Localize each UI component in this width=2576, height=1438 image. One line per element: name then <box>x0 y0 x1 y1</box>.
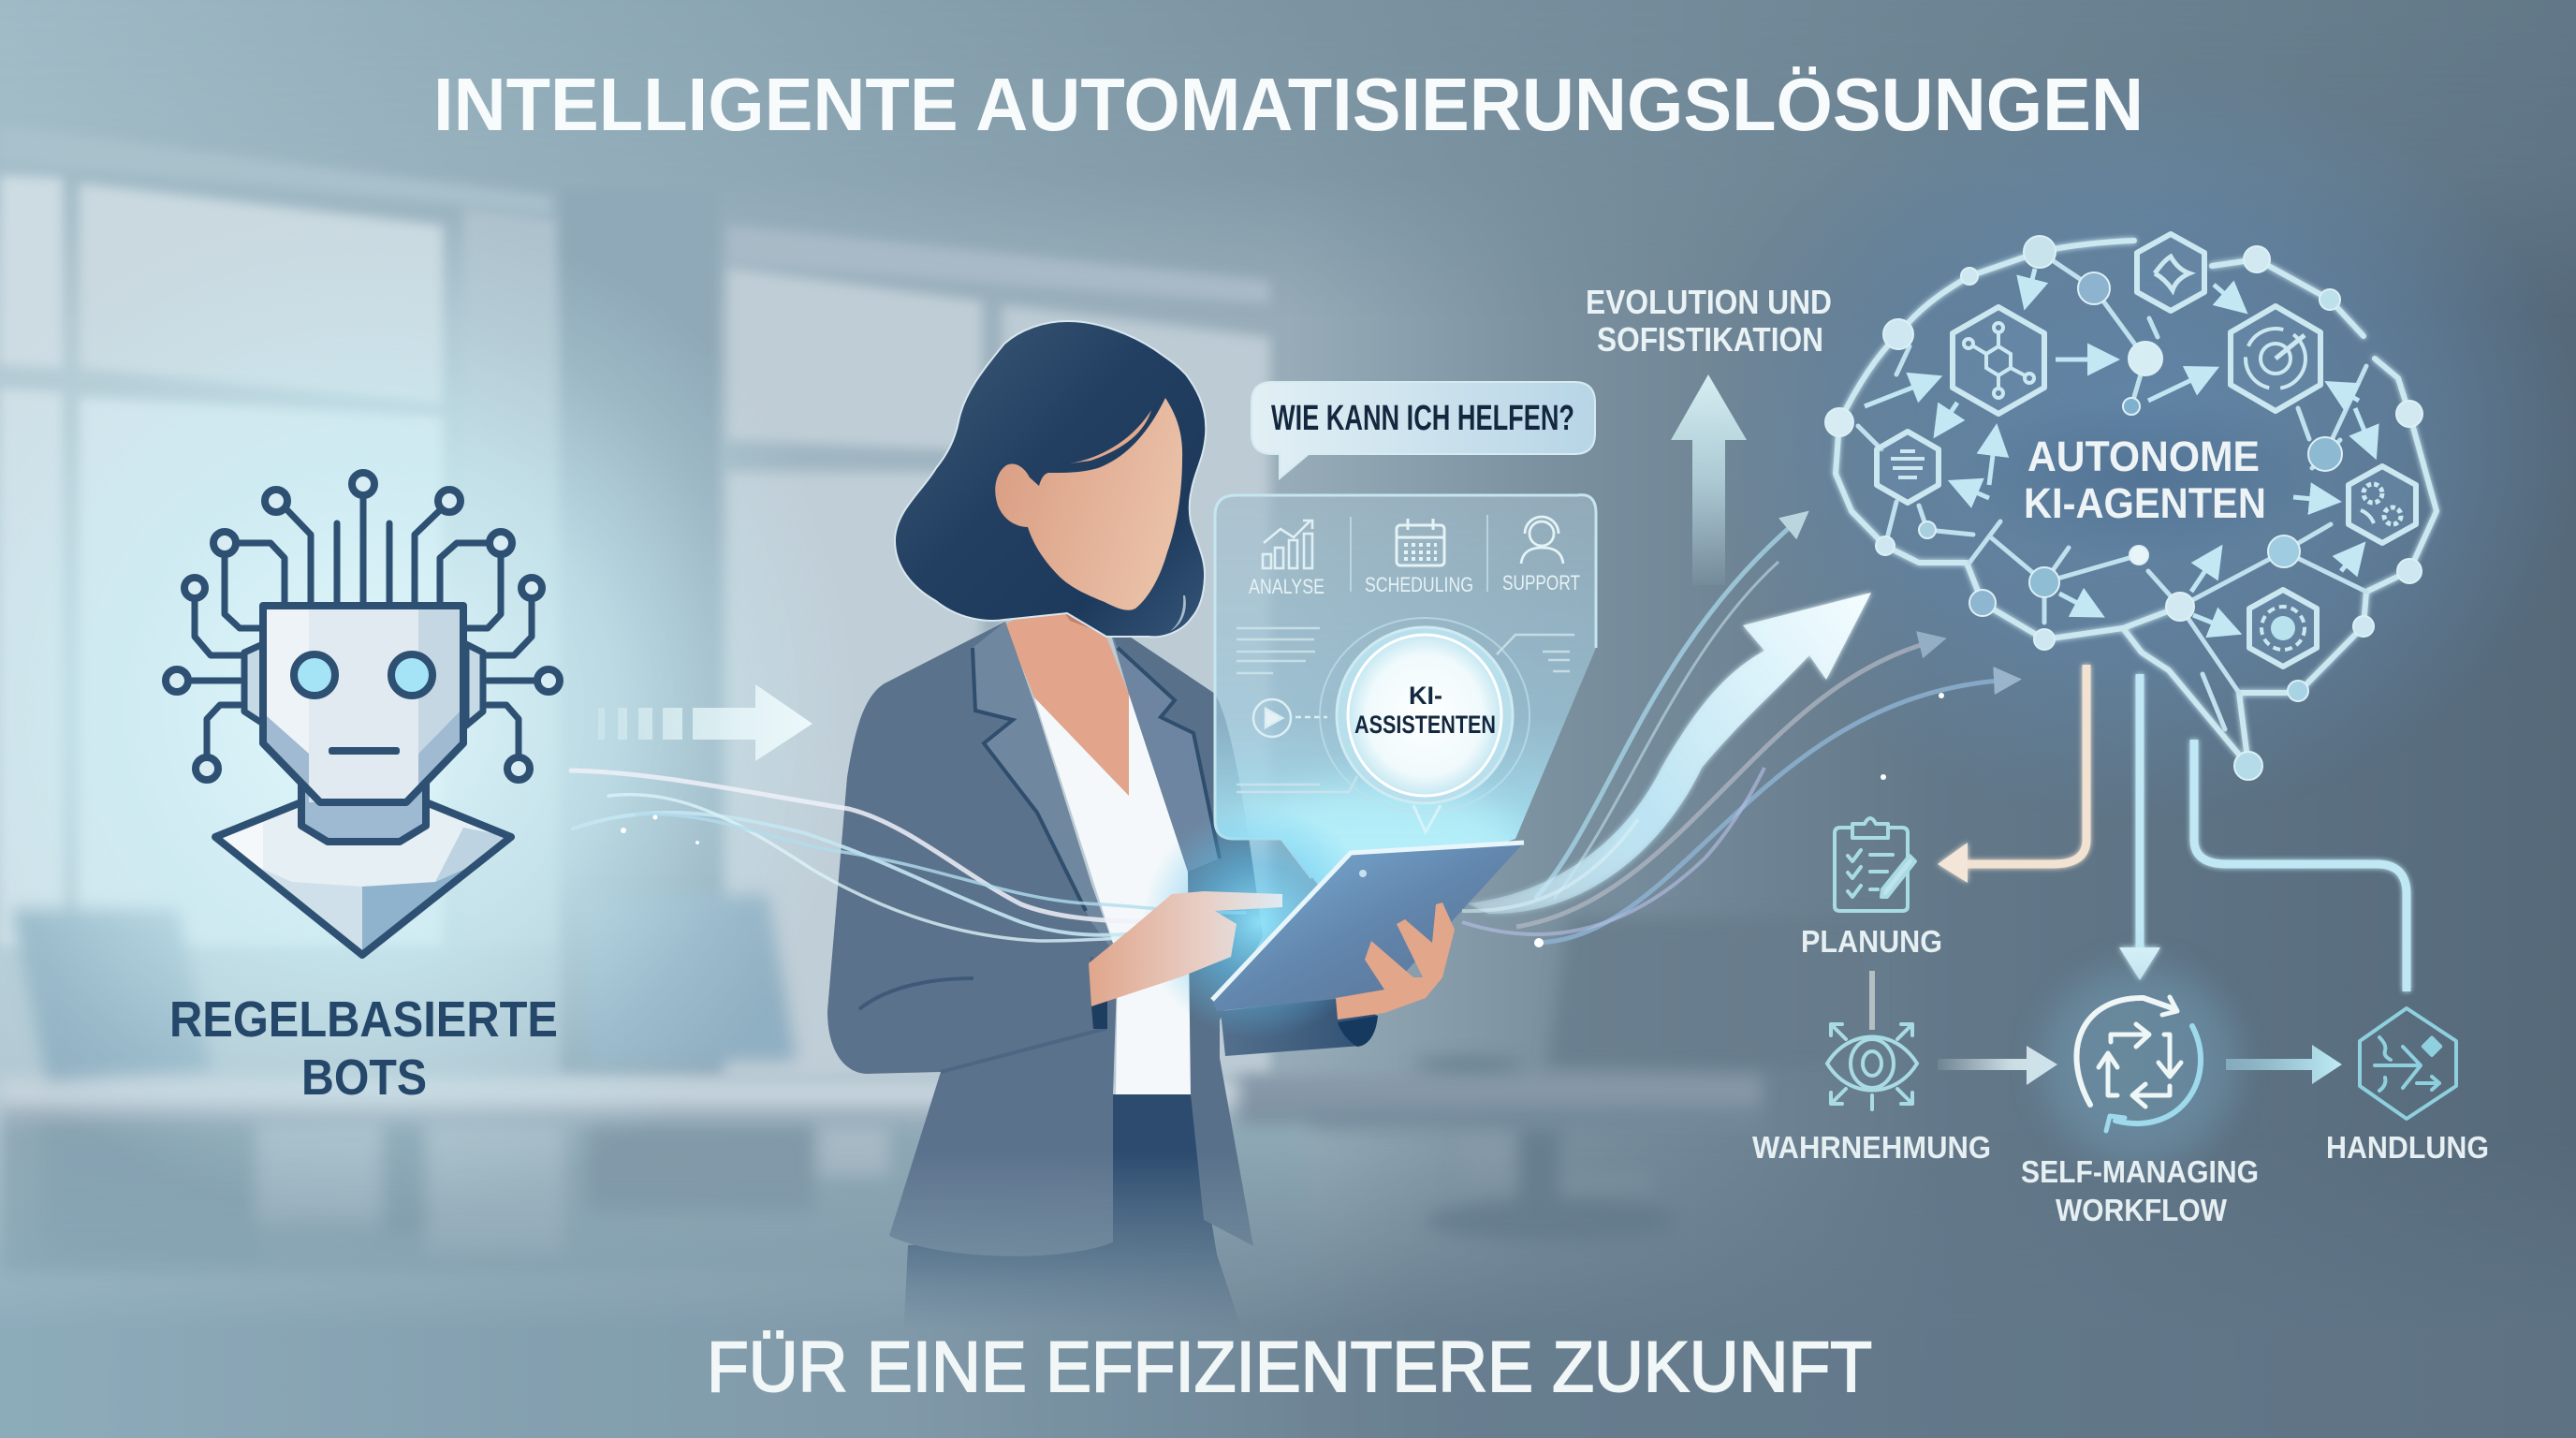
step: handlung <box>2326 1008 2489 1165</box>
hair <box>895 321 1206 637</box>
label: evolution und sofistikation <box>1586 283 1832 359</box>
step: planung: PLANUNG <box>1801 924 1942 959</box>
central text haze <box>1956 393 2331 562</box>
step: self-managing workflow <box>2021 966 2259 1227</box>
icon: clipboard <box>1835 818 1915 911</box>
label: regelbasierte bots <box>169 991 558 1106</box>
icon: support headset <box>1521 517 1563 564</box>
connector: planung to wahrnehmung <box>1869 971 1875 1030</box>
label: analyse: ANALYSE <box>1249 575 1325 598</box>
circle: ki-assistenten: ASSISTENTEN <box>1354 711 1496 739</box>
robot circuit nodes <box>166 473 560 780</box>
icon: calendar <box>1397 519 1444 565</box>
blue arrow <box>1539 680 2012 943</box>
brain hexagons <box>1877 234 2416 667</box>
vertical evolution arrow <box>1671 374 1747 585</box>
label: regelbasierte bots: REGELBASIERTE <box>169 991 558 1048</box>
trousers <box>904 1094 1236 1314</box>
tan arrow <box>1516 640 1938 927</box>
evolution arrows and swoosh <box>1462 517 2012 947</box>
blazer <box>827 622 1378 1256</box>
connector to workflow <box>2119 674 2160 980</box>
icon: eye <box>1827 1024 1917 1109</box>
step: planung <box>1801 818 1942 959</box>
speech bubble <box>1251 382 1595 478</box>
tablet and hands <box>1089 805 1524 1039</box>
step: handlung: HANDLUNG <box>2326 1130 2489 1165</box>
tablet device <box>1212 843 1524 1011</box>
step: wahrnehmung <box>1752 1024 1991 1165</box>
holding hand <box>1336 902 1455 1020</box>
brain network <box>1825 234 2437 780</box>
face and ear <box>995 398 1182 610</box>
step: self-managing workflow: WORKFLOW <box>2056 1193 2228 1227</box>
workflow glow <box>2042 966 2238 1163</box>
robot mouth <box>329 747 400 755</box>
label: evolution und sofistikation: SOFISTIKATION <box>1597 320 1823 359</box>
table and chairs <box>0 894 1872 1274</box>
dividers <box>1351 515 1487 592</box>
hologram glow <box>1236 785 1516 901</box>
arrow: bot to assistant <box>598 684 812 761</box>
icon: cycle arrows <box>2076 997 2201 1131</box>
brain outline <box>1836 241 2437 766</box>
circle: ki-assistenten: KI- <box>1409 682 1442 710</box>
brain connections <box>1858 252 2366 729</box>
brain backdrop glow <box>1704 56 2576 824</box>
label: evolution und sofistikation: EVOLUTION UND <box>1586 283 1832 321</box>
robot body <box>215 802 511 955</box>
connector to planung <box>1938 665 2086 883</box>
robot head <box>263 606 463 802</box>
icon: play button <box>1253 699 1327 737</box>
text line placeholders <box>1237 628 1574 792</box>
label: autonome ki-agenten <box>2024 433 2266 527</box>
speech bubble: WIE KANN ICH HELFEN? <box>1271 399 1574 438</box>
person with tablet <box>827 321 1378 1339</box>
energy waves left <box>571 770 1245 941</box>
connector from handlung <box>2194 740 2407 991</box>
arrow: wahrnehmung to workflow <box>1938 1046 2057 1085</box>
hand glow <box>1142 805 1376 1039</box>
robot circuit wires <box>190 499 535 756</box>
shirt <box>1034 694 1191 1094</box>
step: self-managing workflow: SELF-MANAGING <box>2021 1154 2259 1189</box>
under-table shapes <box>42 1057 1676 1260</box>
hair strand <box>1170 595 1186 631</box>
workflow connectors <box>1938 665 2407 991</box>
hexagon icons <box>1891 257 2401 650</box>
fringe sliver <box>1070 410 1151 463</box>
sweep lines from tablet <box>1462 768 1764 934</box>
icon: analyse chart <box>1263 521 1312 568</box>
big swoosh arrow <box>1468 593 1871 914</box>
robot eyes <box>294 654 432 696</box>
brain nodes <box>1825 236 2422 780</box>
step: wahrnehmung: WAHRNEHMUNG <box>1752 1130 1991 1165</box>
title: INTELLIGENTE AUTOMATISIERUNGSLÖSUNGEN <box>433 63 2144 146</box>
panel body <box>1215 495 1596 899</box>
label: autonome ki-agenten: AUTONOME <box>2027 433 2260 480</box>
icon: decision hexagon <box>2360 1008 2456 1119</box>
label: autonome ki-agenten: KI-AGENTEN <box>2024 479 2266 527</box>
neck and chest <box>1005 614 1129 796</box>
circle: ki-assistenten <box>1320 618 1530 832</box>
thin upper arrow <box>1535 517 1802 899</box>
brain arrows <box>1865 269 2373 631</box>
tagline: FÜR EINE EFFIZIENTERE ZUKUNFT <box>707 1328 1872 1407</box>
label: scheduling: SCHEDULING <box>1365 573 1473 596</box>
robot neck <box>301 782 426 842</box>
label: regelbasierte bots: BOTS <box>301 1049 427 1106</box>
arrow: workflow to handlung <box>2226 1045 2342 1084</box>
pointing hand <box>1089 891 1282 1006</box>
robot icon: regelbasierter bot <box>166 473 560 955</box>
robot ears <box>244 644 483 726</box>
hologram panel <box>1215 495 1596 901</box>
label: support: SUPPORT <box>1502 571 1580 594</box>
